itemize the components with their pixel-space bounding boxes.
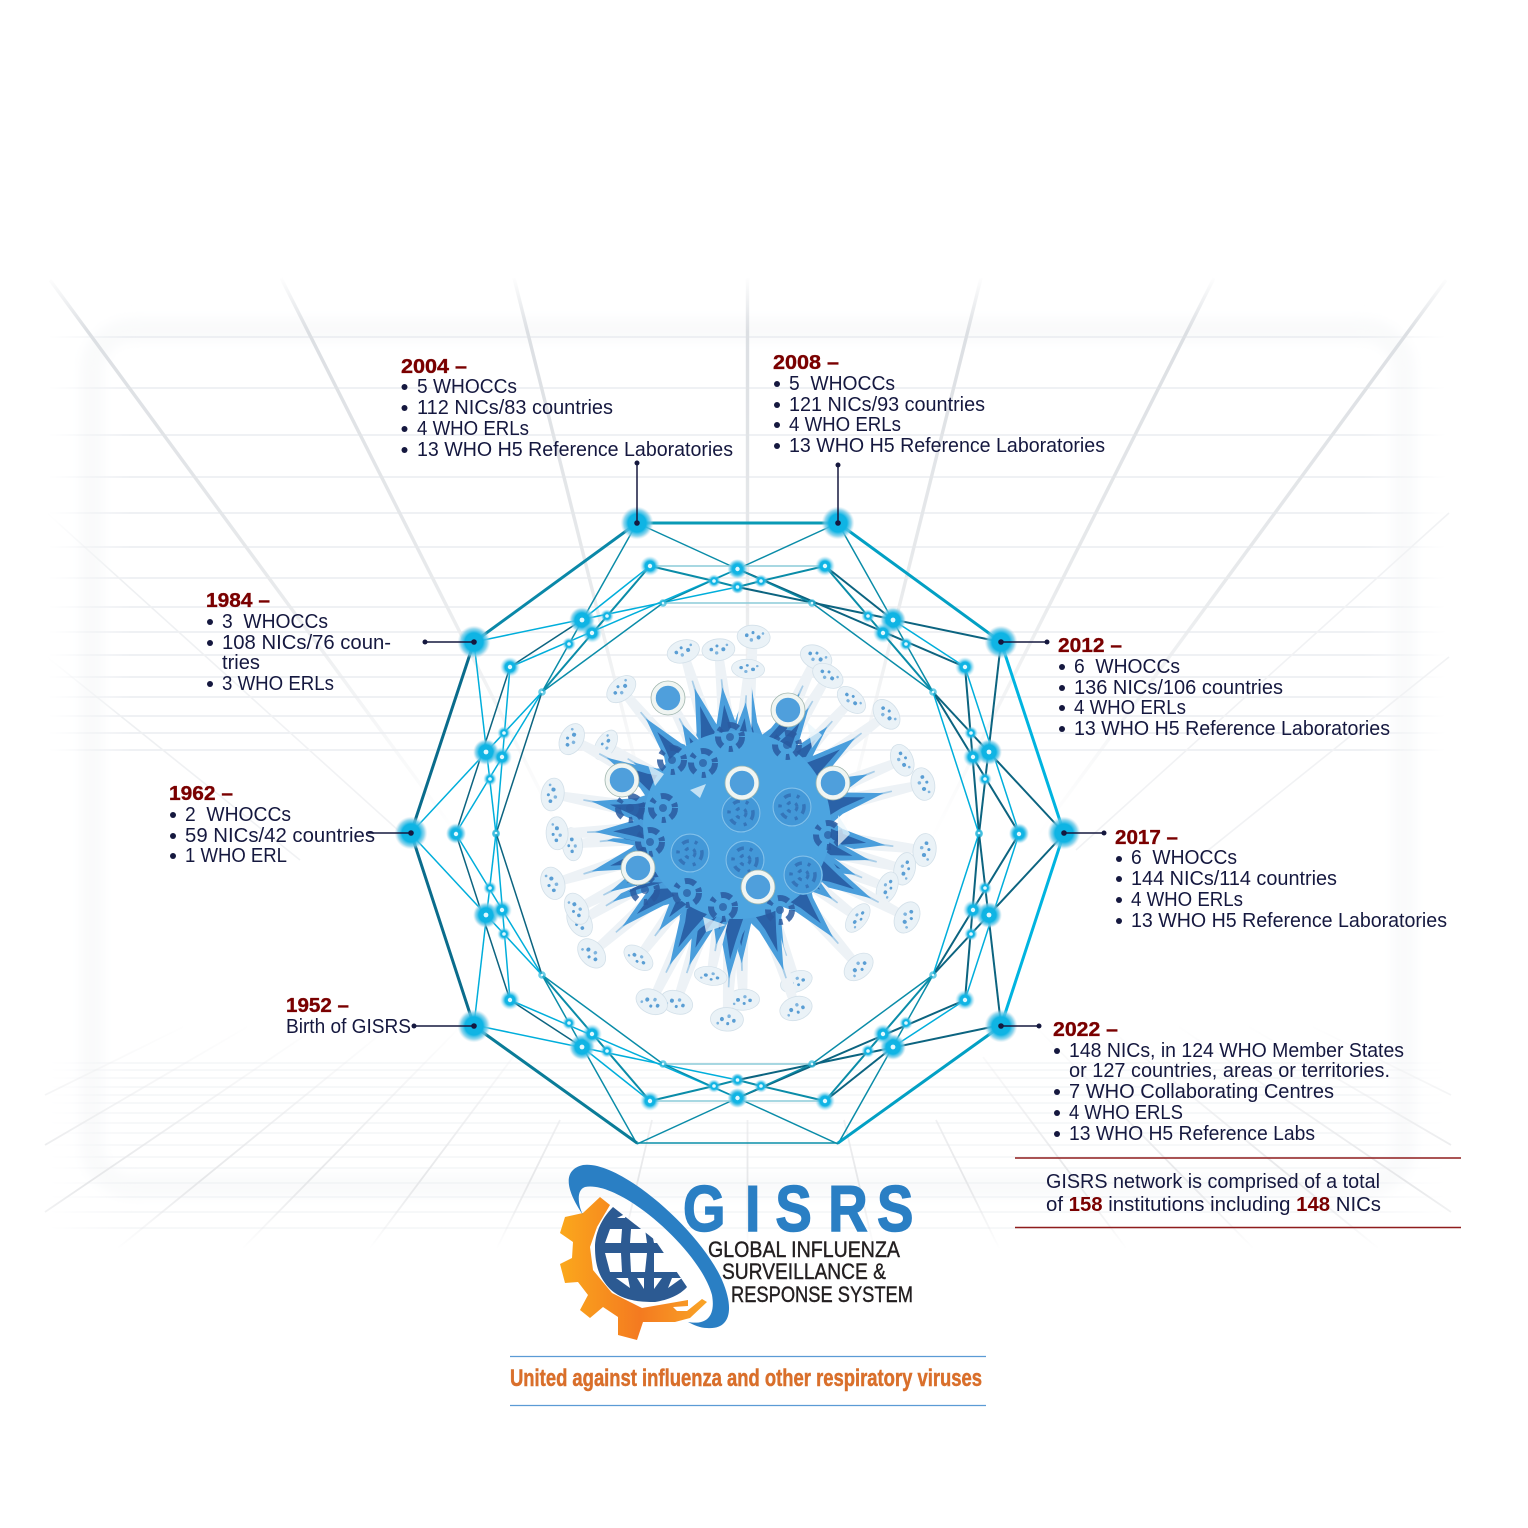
tagline — [510, 1356, 986, 1406]
text block: 2008 — [773, 352, 1105, 457]
text block: 1962: 1962 – — [169, 783, 233, 805]
text block: 2017: 144 NICs/114 countries — [1131, 868, 1337, 890]
text block: 2022: 7 WHO Collaborating Centres — [1069, 1081, 1334, 1103]
virus illustration — [532, 623, 941, 1033]
text block: 1984: 108 NICs/76 coun- — [222, 632, 391, 654]
text block: 1952: 1952 – — [286, 995, 349, 1017]
text block: 2022 — [1053, 1019, 1404, 1145]
text block: 2012: 6 WHOCCs — [1074, 656, 1180, 678]
icon: blue ring — [569, 1165, 729, 1328]
callout: network total: GISRS network is comprised of a total — [1046, 1171, 1380, 1193]
network: inner linked rings — [411, 523, 1064, 1144]
node and leader: 1984 — [422, 626, 490, 658]
text block: 1962 — [169, 783, 375, 867]
text block: 2022: 13 WHO H5 Reference Labs — [1069, 1123, 1315, 1145]
text block: 2004: 112 NICs/83 countries — [417, 397, 613, 419]
node and leader: 2017 — [1048, 816, 1106, 850]
text block: 2008: 13 WHO H5 Reference Laboratories — [789, 435, 1105, 457]
text block: 2017 — [1115, 827, 1447, 932]
text block: 2022: 2022 – — [1053, 1019, 1118, 1041]
logo subtitle — [708, 1237, 913, 1307]
tagline: United against influenza and other respiratory viruses — [510, 1365, 982, 1392]
text block: 2004: 2004 – — [401, 356, 467, 378]
text block: 1984: 1984 – — [206, 590, 270, 612]
text block: 2004: 13 WHO H5 Reference Laboratories — [417, 439, 733, 461]
text block: 1984: 3 WHOCCs — [222, 611, 328, 633]
wordmark: GISRS — [683, 1173, 913, 1245]
text block: 1962: 59 NICs/42 countries — [185, 825, 375, 847]
text block: 2012 — [1058, 635, 1390, 740]
node and leader: 1962 — [368, 816, 428, 850]
text block: 2008: 4 WHO ERLs — [789, 414, 901, 436]
text block: 2017: 13 WHO H5 Reference Laboratories — [1131, 910, 1447, 932]
text block: 2004 — [401, 356, 733, 461]
text block: 2022: or 127 countries, areas or territories. — [1069, 1060, 1390, 1082]
node and leader: 2004 — [620, 460, 654, 540]
text block: 2004: 5 WHOCCs — [417, 376, 517, 398]
logo: GISRS — [560, 1165, 913, 1340]
text block: 2017: 4 WHO ERLs — [1131, 889, 1243, 911]
text block: 1962: 2 WHOCCs — [185, 804, 291, 826]
text block: 1952: Birth of GISRS — [286, 1016, 411, 1038]
text block: 2022: 148 NICs, in 124 WHO Member States — [1069, 1040, 1404, 1062]
node and leader: 1952 — [412, 1010, 490, 1042]
logo subtitle: GLOBAL INFLUENZA — [708, 1237, 900, 1262]
callout: network total — [1015, 1158, 1461, 1228]
text block: 2017: 6 WHOCCs — [1131, 847, 1237, 869]
text block: 2022: 4 WHO ERLS — [1069, 1102, 1183, 1124]
text block: 2012: 136 NICs/106 countries — [1074, 677, 1283, 699]
text block: 1984: 3 WHO ERLs — [222, 673, 334, 695]
callout: network total: of 158 institutions including 148 NICs — [1046, 1194, 1381, 1216]
logo subtitle: RESPONSE SYSTEM — [731, 1282, 913, 1307]
text block: 2008: 5 WHOCCs — [789, 373, 895, 395]
text block: 2012: 4 WHO ERLs — [1074, 697, 1186, 719]
node and leader: 2012 — [984, 626, 1050, 658]
text block: 2008: 121 NICs/93 countries — [789, 394, 985, 416]
icon: gear and hand — [560, 1197, 707, 1340]
node and leader: 2022 — [984, 1010, 1042, 1042]
icon: globe — [595, 1207, 687, 1302]
text block: 2012: 2012 – — [1058, 635, 1122, 657]
network: outer decagon — [411, 523, 1064, 1143]
background: perspective room grid — [45, 278, 1451, 1248]
text block: 2017: 2017 – — [1115, 827, 1178, 849]
logo subtitle: SURVEILLANCE & — [722, 1259, 886, 1284]
text block: 2008: 2008 – — [773, 352, 839, 374]
text block: 2004: 4 WHO ERLs — [417, 418, 529, 440]
text block: 1952 — [286, 995, 411, 1038]
text block: 2012: 13 WHO H5 Reference Laboratories — [1074, 718, 1390, 740]
text block: 1984: tries — [222, 652, 260, 674]
node and leader: 2008 — [822, 462, 854, 540]
text block: 1962: 1 WHO ERL — [185, 845, 287, 867]
text block: 1984 — [206, 590, 391, 695]
